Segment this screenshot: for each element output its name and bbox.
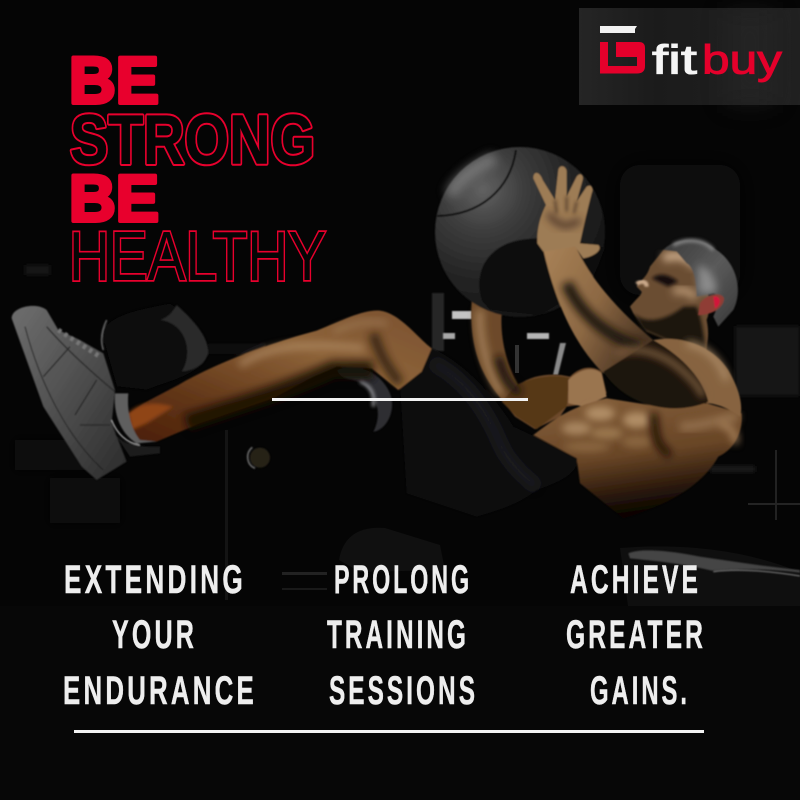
weight plates and stack: [102, 303, 392, 468]
benefit column: achieve greater gains: GREATER: [566, 613, 706, 657]
headline: HEALTHY: HEALTHY: [69, 217, 326, 295]
headline: HEALTHY: HEALTHY: [69, 217, 326, 295]
benefit column: prolong training sessions: TRAINING: [327, 613, 469, 657]
shorts: [400, 348, 577, 517]
benefit column: achieve greater gains: ACHIEVE: [570, 558, 701, 602]
bench pad: [628, 550, 800, 576]
benefit column: extending your endurance: YOUR: [112, 613, 197, 657]
benefit column: extending your endurance: [63, 558, 257, 713]
headline: STRONG: STRONG: [70, 100, 315, 178]
benefit column: extending your endurance: EXTENDING: [64, 558, 246, 602]
benefit column: prolong training sessions: [327, 558, 478, 713]
headline: BE second: BE: [69, 161, 159, 235]
benefit column: extending your endurance: ENDURANCE: [63, 669, 257, 713]
head and hair: [630, 240, 738, 350]
forearm and hand: [533, 166, 655, 373]
benefit column: prolong training sessions: PROLONG: [334, 558, 472, 602]
leg: [127, 311, 432, 442]
benefit column: prolong training sessions: SESSIONS: [329, 669, 478, 713]
decorative line: upper: [272, 398, 528, 401]
logo panel: [579, 8, 800, 105]
upper arm and shoulder: [603, 339, 741, 417]
headline: STRONG: STRONG: [70, 100, 315, 178]
decorative line: lower: [74, 730, 704, 733]
rear arm and chest muscle: [471, 302, 607, 429]
medicine ball: [435, 147, 605, 317]
logo wordmark: [652, 36, 783, 82]
logo wordmark: buy: [702, 36, 783, 82]
logo mark: [600, 26, 645, 74]
photo: athlete with medicine ball: [12, 147, 800, 576]
sneaker: [12, 306, 160, 480]
benefit column: achieve greater gains: [566, 558, 706, 713]
headline: [69, 43, 326, 295]
headline: BE: BE: [69, 43, 159, 117]
benefit column: achieve greater gains: GAINS.: [590, 669, 690, 713]
logo wordmark: fit: [652, 36, 698, 82]
torso and abs: [533, 398, 742, 518]
